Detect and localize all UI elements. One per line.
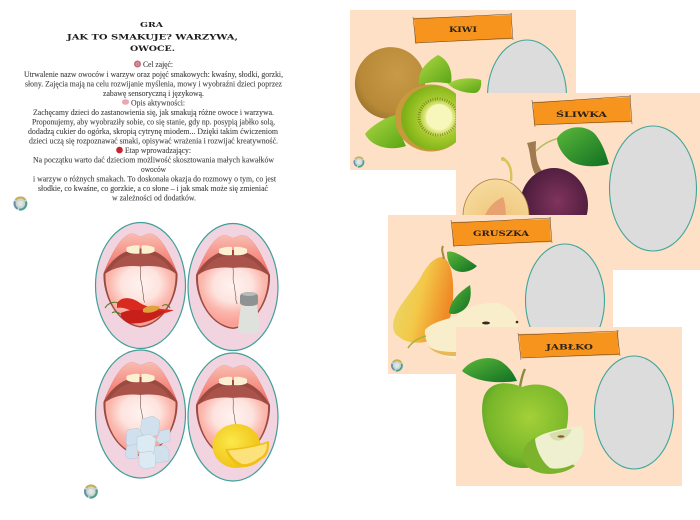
text block: activity description: Etap wprowadzający:	[125, 146, 191, 155]
text block: activity description: słony. Zajęcia mają na celu rozwijanie myślenia, mowy i wyobraźni dzieci poprzez	[25, 80, 282, 88]
text block: activity description: słodkie, co kwaśne, co gorzkie, a co słone – i jak smak może się zmieniać	[38, 184, 268, 193]
illustration: pear	[393, 246, 518, 360]
icon: chili peppers	[105, 298, 174, 323]
title: OWOCE.	[130, 44, 175, 53]
panel: mouth with lemon	[188, 353, 278, 481]
panel: mouth with chili	[96, 222, 186, 348]
photo oval	[610, 126, 696, 251]
panel: plum card	[456, 93, 700, 270]
photo oval	[594, 356, 674, 469]
text block: activity description: dodadzą cukier do ogórka, skropią cytrynę miodem... Dzięki takim ćwiczeniom	[28, 127, 279, 136]
photo oval	[526, 244, 604, 357]
banner: KIWI	[413, 13, 513, 44]
text block: activity description: Utrwalenie nazw owoców i warzyw oraz pojęć smakowych: kwaśny, słodki, gorzki,	[24, 70, 283, 79]
banner: JABŁKO	[518, 330, 620, 360]
text block: activity description: Opis aktywności:	[131, 98, 185, 108]
icon: sugar cubes	[125, 416, 170, 469]
icon: logo bottom	[84, 484, 98, 498]
text block: activity description: owoców	[141, 165, 166, 174]
photo oval	[488, 40, 566, 152]
icon: target	[134, 60, 141, 68]
icon: logo	[391, 360, 403, 372]
title: JAK TO SMAKUJE? WARZYWA,	[66, 32, 238, 42]
banner: KIWI: KIWI	[449, 25, 478, 34]
text block: activity description: Na początku warto dać dzieciom możliwość skosztowania małych kawałków	[33, 156, 274, 164]
icon: brain	[122, 99, 129, 105]
panel: apple card	[456, 327, 682, 486]
text block: activity description: dzieci uczą się rozpoznawać smaki, opisywać wrażenia i rozwijać kreatywność.	[29, 136, 278, 146]
banner: ŚLIWKA: ŚLIWKA	[556, 110, 607, 119]
banner: ŚLIWKA	[532, 95, 632, 127]
icon: logo	[354, 156, 364, 168]
icon: lemon	[212, 424, 269, 468]
text block: activity description	[24, 60, 283, 202]
text block: activity description: Proponujemy, aby wyobraziły sobie, co się stanie, gdy np. posypią jabłko solą,	[32, 118, 275, 126]
panel: mouth with sugar	[96, 350, 186, 478]
text block: activity description: Cel zajęć:	[143, 60, 173, 69]
text block: activity description: i warzyw o różnych smakach. To doskonała okazja do rozmowy o tym, co jest	[33, 174, 277, 184]
icon: logo top	[14, 196, 28, 210]
illustration: kiwi	[345, 37, 481, 151]
illustration: apple	[462, 358, 584, 474]
panel: mouth with salt	[188, 224, 278, 350]
illustration: plum	[463, 127, 609, 253]
panel: pear card	[388, 215, 613, 374]
panel: kiwi card	[345, 10, 576, 170]
icon: salt shaker	[238, 292, 260, 333]
text block: activity description: w zależności od dodatków.	[112, 194, 196, 202]
banner: GRUSZKA: GRUSZKA	[473, 229, 529, 238]
text block: activity description: Zachęcamy dzieci do zastanowienia się, jak smakują różne owoce i warzywa.	[33, 108, 274, 117]
text block: activity description: zabawę sensoryczną i językową.	[103, 89, 204, 98]
title	[66, 21, 238, 53]
title: GRA	[140, 21, 164, 29]
banner: GRUSZKA	[451, 217, 552, 247]
icon: apple	[116, 147, 123, 153]
banner: JABŁKO: JABŁKO	[545, 342, 594, 352]
